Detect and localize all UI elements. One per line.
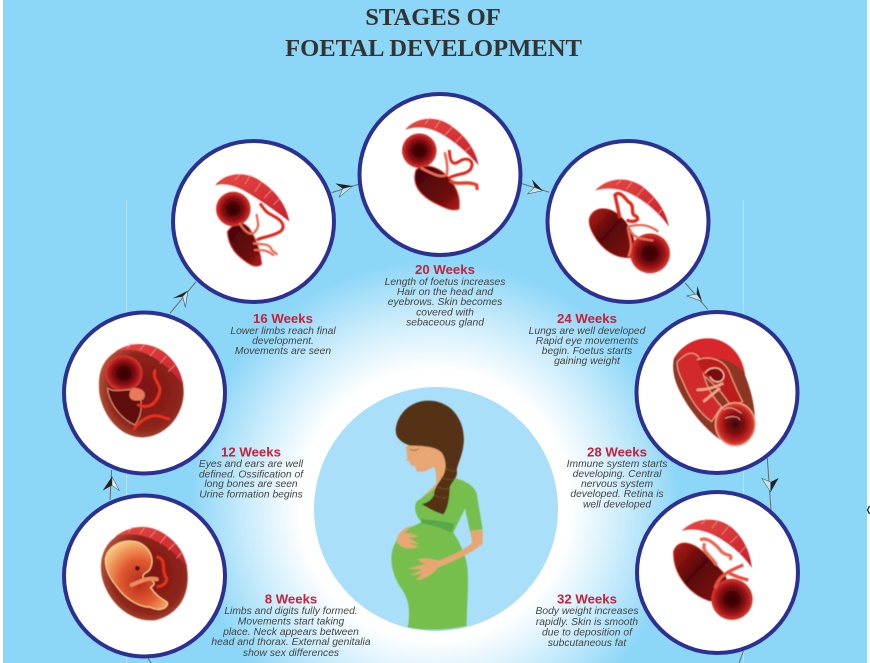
faint vertical guide right — [743, 200, 744, 663]
panel: 24 weeks — [548, 141, 708, 302]
text block: 16 weeks: 16 Weeks — [253, 311, 313, 326]
text block: 24 weeks: gaining weight — [554, 356, 621, 367]
text block: 24 weeks: 24 Weeks — [557, 311, 617, 326]
icon: 16 week foetus — [215, 174, 289, 266]
text block: 32 weeks — [535, 592, 639, 649]
arrow: 12 to 16 weeks — [170, 282, 196, 313]
circle — [636, 312, 798, 473]
text block: 24 weeks: begin. Foetus starts — [542, 346, 632, 357]
edge mark — [868, 506, 870, 514]
arrow: 8 to 12 weeks — [103, 470, 119, 500]
icon: 8 week embryo — [101, 527, 188, 620]
text block: 24 weeks: Rapid eye movements — [536, 336, 638, 347]
text block: 20 weeks: Length of foetus increases — [385, 277, 505, 288]
text block: 28 weeks: developed. Retina is — [570, 489, 664, 500]
title: FOETAL DEVELOPMENT — [285, 35, 582, 62]
arrow: 24 to 28 weeks — [685, 283, 708, 309]
icon: 12 week foetus — [99, 343, 184, 437]
arrow: 28 to 32 weeks — [762, 458, 779, 510]
panel: 16 weeks — [173, 141, 334, 302]
text block: 32 weeks: subcutaneous fat — [548, 638, 627, 649]
text block: 28 weeks: developing. Central — [573, 469, 662, 480]
text block: 32 weeks: 32 Weeks — [557, 592, 617, 606]
text block: 20 weeks: eyebrows. Skin becomes — [388, 297, 502, 308]
text block: 24 weeks: Lungs are well developed — [529, 326, 646, 337]
text block: 16 weeks: Movements are seen — [235, 346, 331, 357]
circle — [173, 141, 334, 302]
circle — [360, 94, 520, 255]
title — [285, 4, 582, 62]
text block: 8 weeks: head and thorax. External genitalia — [211, 637, 371, 648]
arrow stub below 32 weeks — [739, 651, 744, 663]
icon: 28 week foetus — [673, 338, 755, 446]
text block: 24 weeks — [529, 311, 646, 367]
dress — [391, 478, 483, 630]
icon: 32 week foetus — [673, 519, 753, 620]
waist band — [421, 519, 454, 533]
circle backdrop — [314, 387, 558, 631]
icon: pregnant woman — [391, 401, 483, 630]
arrow: 20 to 24 weeks — [521, 179, 549, 194]
text block: 28 weeks: well developed — [583, 500, 651, 510]
panel: 28 weeks — [636, 312, 798, 473]
text block: 16 weeks: Lower limbs reach final — [230, 326, 336, 337]
text block: 12 weeks: long bones are seen — [204, 479, 298, 490]
panel: 20 weeks — [360, 94, 520, 255]
text block: 28 weeks — [567, 444, 667, 510]
circle — [64, 496, 225, 656]
text block: 28 weeks: 28 Weeks — [587, 444, 647, 460]
text block: 16 weeks — [230, 311, 336, 357]
text block: 12 weeks: Eyes and ears are well — [199, 459, 304, 470]
text block: 32 weeks: rapidly. Skin is smooth — [536, 617, 638, 628]
text block: 20 weeks: Hair on the head and — [397, 287, 493, 298]
text block: 28 weeks: Immune system starts — [567, 459, 667, 470]
circle — [64, 312, 225, 474]
text block: 16 weeks: development. — [252, 336, 314, 347]
hair and braid — [396, 401, 464, 514]
face and neck — [406, 440, 452, 505]
text block: 8 weeks: show sex differences — [243, 648, 339, 659]
text block: 32 weeks: Body weight increases — [535, 606, 639, 617]
icon: 20 week foetus — [402, 118, 479, 210]
arrow stub below 8 weeks — [148, 658, 151, 663]
icon: 24 week foetus — [589, 179, 670, 273]
circle — [548, 141, 708, 302]
text block: 28 weeks: nervous system — [581, 479, 653, 490]
text block: 20 weeks: sebaceous gland — [406, 318, 484, 328]
eye — [410, 448, 419, 450]
title: STAGES OF — [365, 4, 501, 31]
forearm and lower hand — [408, 530, 483, 580]
faint vertical guide left — [126, 200, 127, 663]
text block: 12 weeks — [199, 444, 304, 500]
circle — [637, 492, 798, 653]
upper hand — [397, 526, 419, 548]
arrow: 16 to 20 weeks — [332, 183, 358, 197]
text block: 32 weeks: due to deposition of — [542, 628, 633, 638]
text block: 12 weeks: defined. Ossification of — [199, 470, 304, 480]
panel: 8 weeks — [64, 496, 225, 656]
text block: 12 weeks: 12 Weeks — [221, 444, 281, 460]
text block: 8 weeks — [211, 592, 371, 659]
text block: 20 weeks: covered with — [416, 308, 474, 318]
text block: 8 weeks: Movements start taking — [238, 616, 344, 628]
panel: mother — [314, 387, 558, 631]
panel: 12 weeks — [64, 312, 225, 474]
text block: 8 weeks: place. Neck appears between — [222, 627, 359, 638]
text block: 8 weeks: 8 Weeks — [265, 592, 317, 606]
braid lines — [435, 468, 456, 498]
text block: 20 weeks — [385, 262, 505, 328]
text block: 12 weeks: Urine formation begins — [199, 490, 303, 500]
panel: 32 weeks — [637, 492, 798, 653]
text block: 8 weeks: Limbs and digits fully formed. — [224, 606, 358, 617]
text block: 20 weeks: 20 Weeks — [415, 262, 475, 277]
central white glow — [190, 260, 680, 663]
